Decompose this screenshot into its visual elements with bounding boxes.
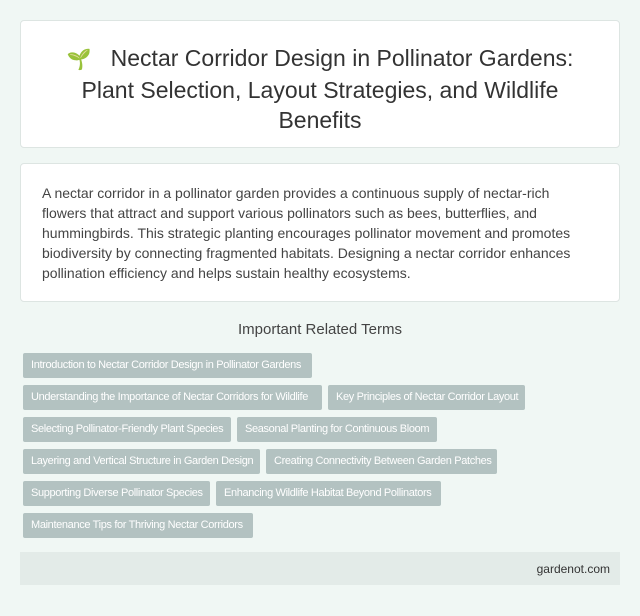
tags: Key Principles of Nectar Corridor Layout (336, 391, 518, 403)
description card (20, 163, 620, 302)
tags: Understanding the Importance of Nectar Corridors for Wildlife (31, 391, 308, 403)
title: 🌱 Nectar Corridor Design in Pollinator Gardens: Plant Selection, Layout Strategies, and Wildlife Benefits (67, 45, 573, 133)
footer (20, 552, 620, 585)
section heading: Important Related Terms (238, 321, 402, 338)
tags: Seasonal Planting for Continuous Bloom (245, 423, 429, 435)
header card (20, 20, 620, 148)
tags: Maintenance Tips for Thriving Nectar Corridors (31, 519, 243, 531)
tags: Selecting Pollinator-Friendly Plant Species (31, 423, 223, 435)
tags: Introduction to Nectar Corridor Design in Pollinator Gardens (31, 359, 301, 371)
tags: Creating Connectivity Between Garden Patches (274, 455, 492, 467)
description text: A nectar corridor in a pollinator garden provides a continuous supply of nectar-rich flowers that attract and support various pollinators such as bees, butterflies, and hummingbirds. This strategic planting encourages pollinator movement and promotes biodiversity by connecting fragmented habitats. Designing a nectar corridor enhances pollination efficiency and helps sustain healthy ecosystems. (42, 185, 570, 281)
footer text: gardenot.com (537, 562, 610, 576)
tags: Supporting Diverse Pollinator Species (31, 487, 203, 499)
tags: Layering and Vertical Structure in Garden Design (31, 455, 253, 467)
tags: Enhancing Wildlife Habitat Beyond Pollinators (224, 487, 431, 499)
